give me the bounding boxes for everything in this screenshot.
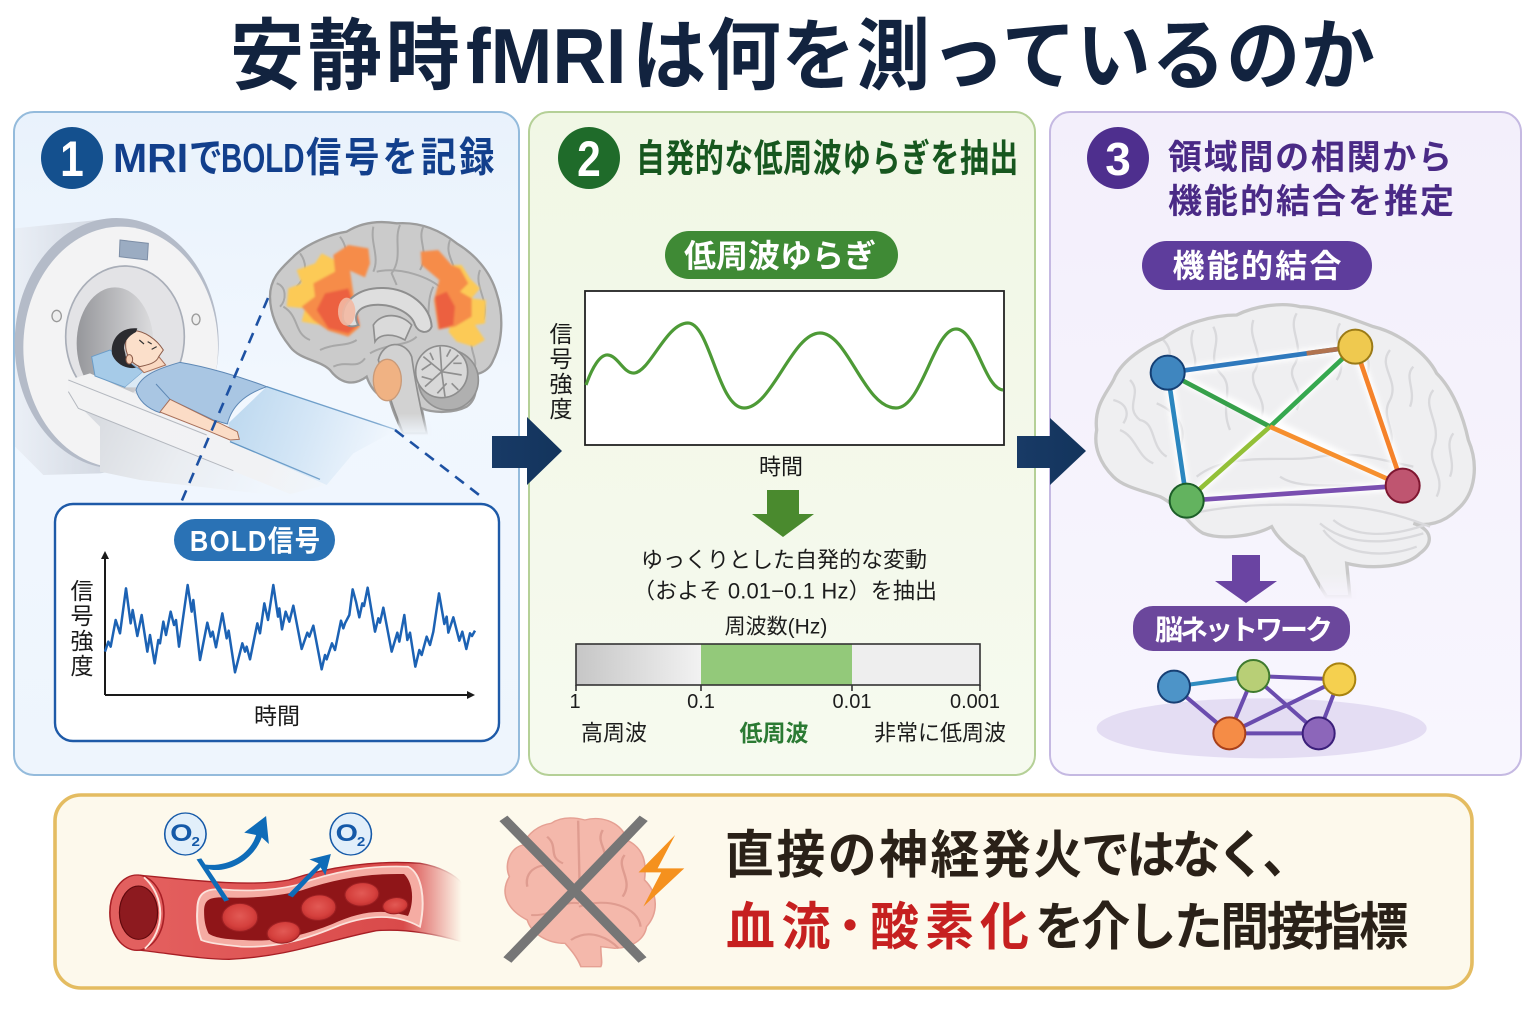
- callout background: [55, 795, 1472, 988]
- y axis label: 強: [550, 371, 572, 397]
- white glow behind connections: [1168, 347, 1403, 501]
- very low frequency label: 非常に低周波: [874, 720, 1006, 746]
- illustration: crossed-out brain with spark: [503, 818, 684, 967]
- cross mark: [503, 818, 644, 960]
- panel 1 heading: で: [189, 135, 223, 181]
- step 1 badge: 1: [60, 131, 84, 187]
- illustration: brain with activation: [270, 222, 501, 436]
- callout text: [725, 826, 1408, 956]
- network nodes: [1158, 660, 1355, 749]
- high frequency label: 高周波: [581, 720, 647, 746]
- line 2: を介した間接指標: [1035, 898, 1408, 956]
- low frequency pill: 低周波ゆらぎ: [684, 238, 876, 274]
- red blood cells: [222, 881, 410, 946]
- panel 2 heading: 自発的な低周波ゆらぎを抽出: [636, 138, 1018, 180]
- functional connectivity pill: 機能的結合: [1172, 248, 1342, 284]
- arrow: panel 2 to panel 3: [1017, 418, 1086, 485]
- y axis label: 信: [550, 321, 572, 347]
- y axis label: 号: [550, 346, 572, 372]
- brainstem: [378, 345, 427, 433]
- line 2: ・: [828, 902, 872, 952]
- step 2 badge: [558, 127, 620, 189]
- extraction description: ゆっくりとした自発的な変動: [641, 548, 927, 572]
- bottom callout panel: [55, 795, 1472, 988]
- zoom guide lines: [180, 298, 483, 505]
- x axis label: 時間: [254, 703, 300, 729]
- y axis label: 強: [70, 628, 94, 654]
- cerebellum: [418, 350, 478, 410]
- line 1: 直接の神経発火: [725, 826, 1082, 884]
- line 1: [725, 826, 1311, 884]
- line 1: ではなく、: [1081, 826, 1311, 884]
- lightning bolt: [639, 835, 684, 907]
- network shadow: [1097, 698, 1427, 758]
- panel 1 heading: [113, 135, 494, 181]
- tick labels: 0.01: [833, 691, 871, 713]
- O2 bubble right: [330, 813, 371, 855]
- network diagram: [1097, 660, 1427, 758]
- panel 3 background: [1050, 112, 1521, 775]
- corpus callosum: [343, 288, 432, 332]
- brain with connectivity: [1096, 305, 1474, 599]
- node connections: [1168, 347, 1403, 501]
- panel 1: BOLD recording: [14, 112, 519, 775]
- O2 bubble left: 2: [192, 834, 200, 849]
- panel 1 heading: MRI: [113, 135, 188, 181]
- panel 2 background: [529, 112, 1035, 775]
- panel 1 heading: BOLD: [221, 135, 305, 181]
- tick labels: 0.001: [950, 691, 1000, 713]
- x axis label: 時間: [759, 454, 803, 480]
- panel 3 heading: [1168, 139, 1454, 221]
- y axis label: 号: [70, 603, 94, 629]
- brain network pill: 脳ネットワーク: [1155, 614, 1333, 646]
- panel 3: functional connectivity: [1050, 112, 1521, 775]
- title: は何を測っているのか: [632, 13, 1375, 101]
- step 2 badge: 2: [577, 131, 601, 187]
- tick labels: 1: [569, 691, 581, 713]
- low frequency pill: [665, 231, 898, 279]
- title: [230, 13, 1375, 101]
- illustration: blood vessel with oxygen: [110, 813, 462, 959]
- waveform chart: [585, 291, 1004, 445]
- extraction description: [633, 548, 937, 604]
- panel 1 heading: 信号を記録: [306, 135, 494, 181]
- panel 3 heading: 機能的結合を推定: [1168, 183, 1454, 221]
- line 2: [726, 898, 1408, 956]
- O2 bubble left: O: [170, 819, 193, 846]
- region nodes: [1151, 330, 1420, 518]
- frequency bar: [569, 616, 1006, 746]
- step 3 badge: [1087, 127, 1149, 189]
- panel 3 heading: 領域間の相関から: [1168, 139, 1452, 177]
- axes: [101, 551, 475, 699]
- illustration: patient in MRI scanner: [15, 218, 397, 497]
- bar title: 周波数(Hz): [725, 616, 827, 638]
- O2 bubble right: O: [336, 819, 358, 846]
- y axis label: 度: [550, 396, 572, 422]
- arrow: to brain network: [1215, 555, 1277, 603]
- O2 bubble left: [165, 813, 206, 855]
- panel 1 background: [14, 112, 519, 775]
- green waveform: [586, 323, 1003, 408]
- BOLD trace: [105, 585, 475, 672]
- BOLD pill label: [174, 519, 335, 561]
- brain network pill: [1133, 606, 1350, 651]
- arrow: panel 1 to panel 2: [492, 417, 562, 485]
- extraction description: （およそ 0.01−0.1 Hz）を抽出: [633, 578, 937, 604]
- activation patches: [287, 245, 486, 347]
- tick labels: 0.1: [687, 691, 715, 713]
- network edges: [1174, 676, 1339, 733]
- line 2: 酸素化: [870, 898, 1029, 956]
- BOLD pill label: BOLD信号: [190, 525, 320, 557]
- y axis label: 信: [70, 578, 94, 604]
- step 3 badge: 3: [1105, 133, 1131, 185]
- low frequency label: 低周波: [740, 720, 808, 746]
- functional connectivity pill: [1142, 241, 1372, 290]
- tick labels: [569, 691, 1000, 713]
- panel 2: low-frequency extraction: [529, 112, 1035, 775]
- y axis label: 度: [70, 653, 94, 679]
- card background: [55, 504, 499, 741]
- title: fMRI: [466, 13, 626, 101]
- y axis label: [550, 321, 572, 422]
- y axis label: [70, 578, 94, 679]
- step 1 badge: [41, 127, 103, 189]
- BOLD signal chart card: [55, 504, 499, 741]
- arrow: extraction down: [752, 490, 814, 537]
- title: 安静時: [230, 13, 460, 101]
- O2 bubble right: 2: [357, 834, 366, 849]
- oxygen arrows: [197, 816, 331, 902]
- line 2: 血流: [726, 898, 830, 956]
